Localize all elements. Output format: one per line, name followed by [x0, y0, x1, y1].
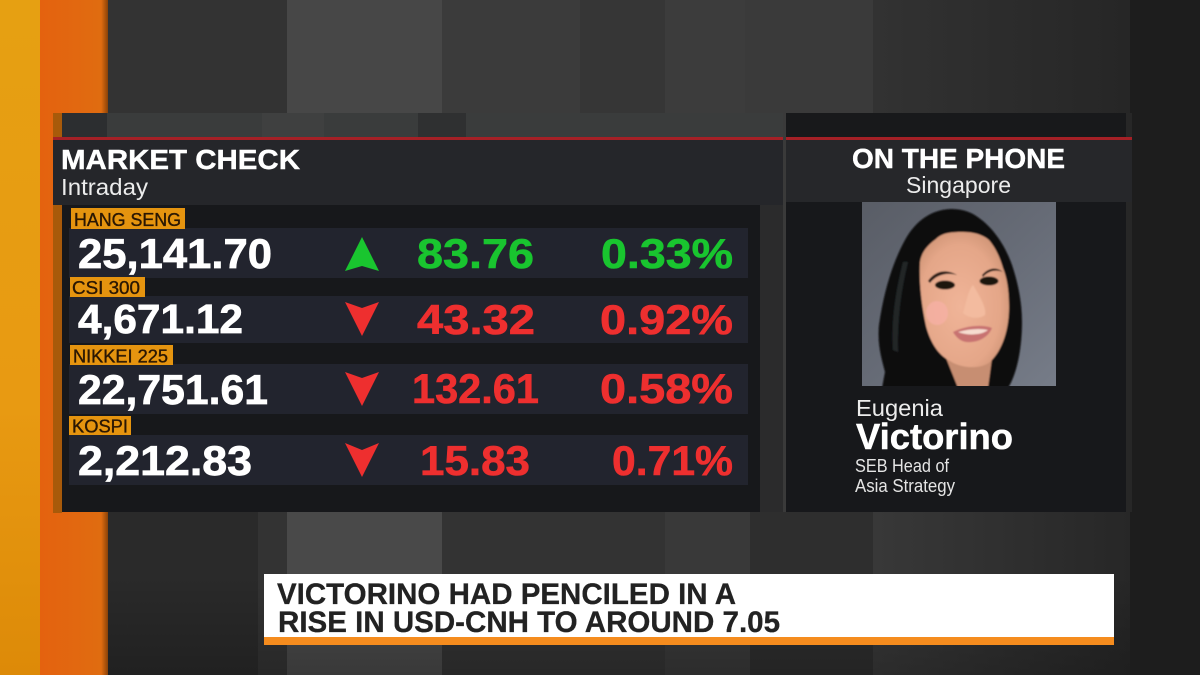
subheading: singapore: Singapore: [906, 172, 1011, 198]
row: csi 300: CSI 300: [72, 278, 140, 298]
row: kospi: 0.71%: [612, 437, 733, 484]
panel: market check: [53, 113, 786, 512]
row: kospi: 2,212.83: [78, 437, 252, 484]
row: hang seng: 0.33%: [601, 230, 733, 277]
portrait photo: [862, 202, 1056, 388]
heading: market check: MARKET CHECK: [61, 144, 300, 175]
person name and role: Victorino: [856, 416, 1013, 457]
row: nikkei 225: 0.58%: [600, 365, 733, 412]
row: csi 300: 43.32: [417, 296, 535, 343]
lower third headline: RISE IN USD-CNH TO AROUND 7.05: [278, 606, 780, 639]
row: csi 300: 4,671.12: [78, 296, 243, 342]
row: hang seng: 25,141.70: [78, 230, 272, 277]
row: kospi: [69, 416, 748, 485]
lower third headline: VICTORINO HAD PENCILED IN A: [277, 578, 736, 611]
row: nikkei 225: [69, 345, 748, 414]
row: nikkei 225: 132.61: [412, 365, 539, 412]
row: csi 300: 0.92%: [600, 296, 733, 343]
row: nikkei 225: 22,751.61: [78, 366, 268, 413]
orange side stripes: [0, 0, 108, 675]
person name and role: Asia Strategy: [855, 476, 955, 496]
person name and role: SEB Head of: [855, 456, 950, 476]
person name and role: Eugenia: [856, 395, 943, 421]
person name and role: [855, 395, 1013, 496]
row: hang seng: 83.76: [417, 230, 534, 277]
subheading: intraday: Intraday: [61, 174, 149, 200]
row: csi 300: [69, 277, 748, 343]
row: hang seng: HANG SENG: [74, 210, 181, 230]
heading: on the phone: ON THE PHONE: [852, 143, 1065, 174]
lower third headline: [264, 574, 1114, 645]
row: nikkei 225: NIKKEI 225: [73, 346, 168, 366]
row: hang seng: [69, 208, 748, 278]
row: kospi: 15.83: [420, 437, 530, 484]
panel: on the phone: [786, 113, 1132, 512]
row: kospi: KOSPI: [72, 416, 128, 436]
